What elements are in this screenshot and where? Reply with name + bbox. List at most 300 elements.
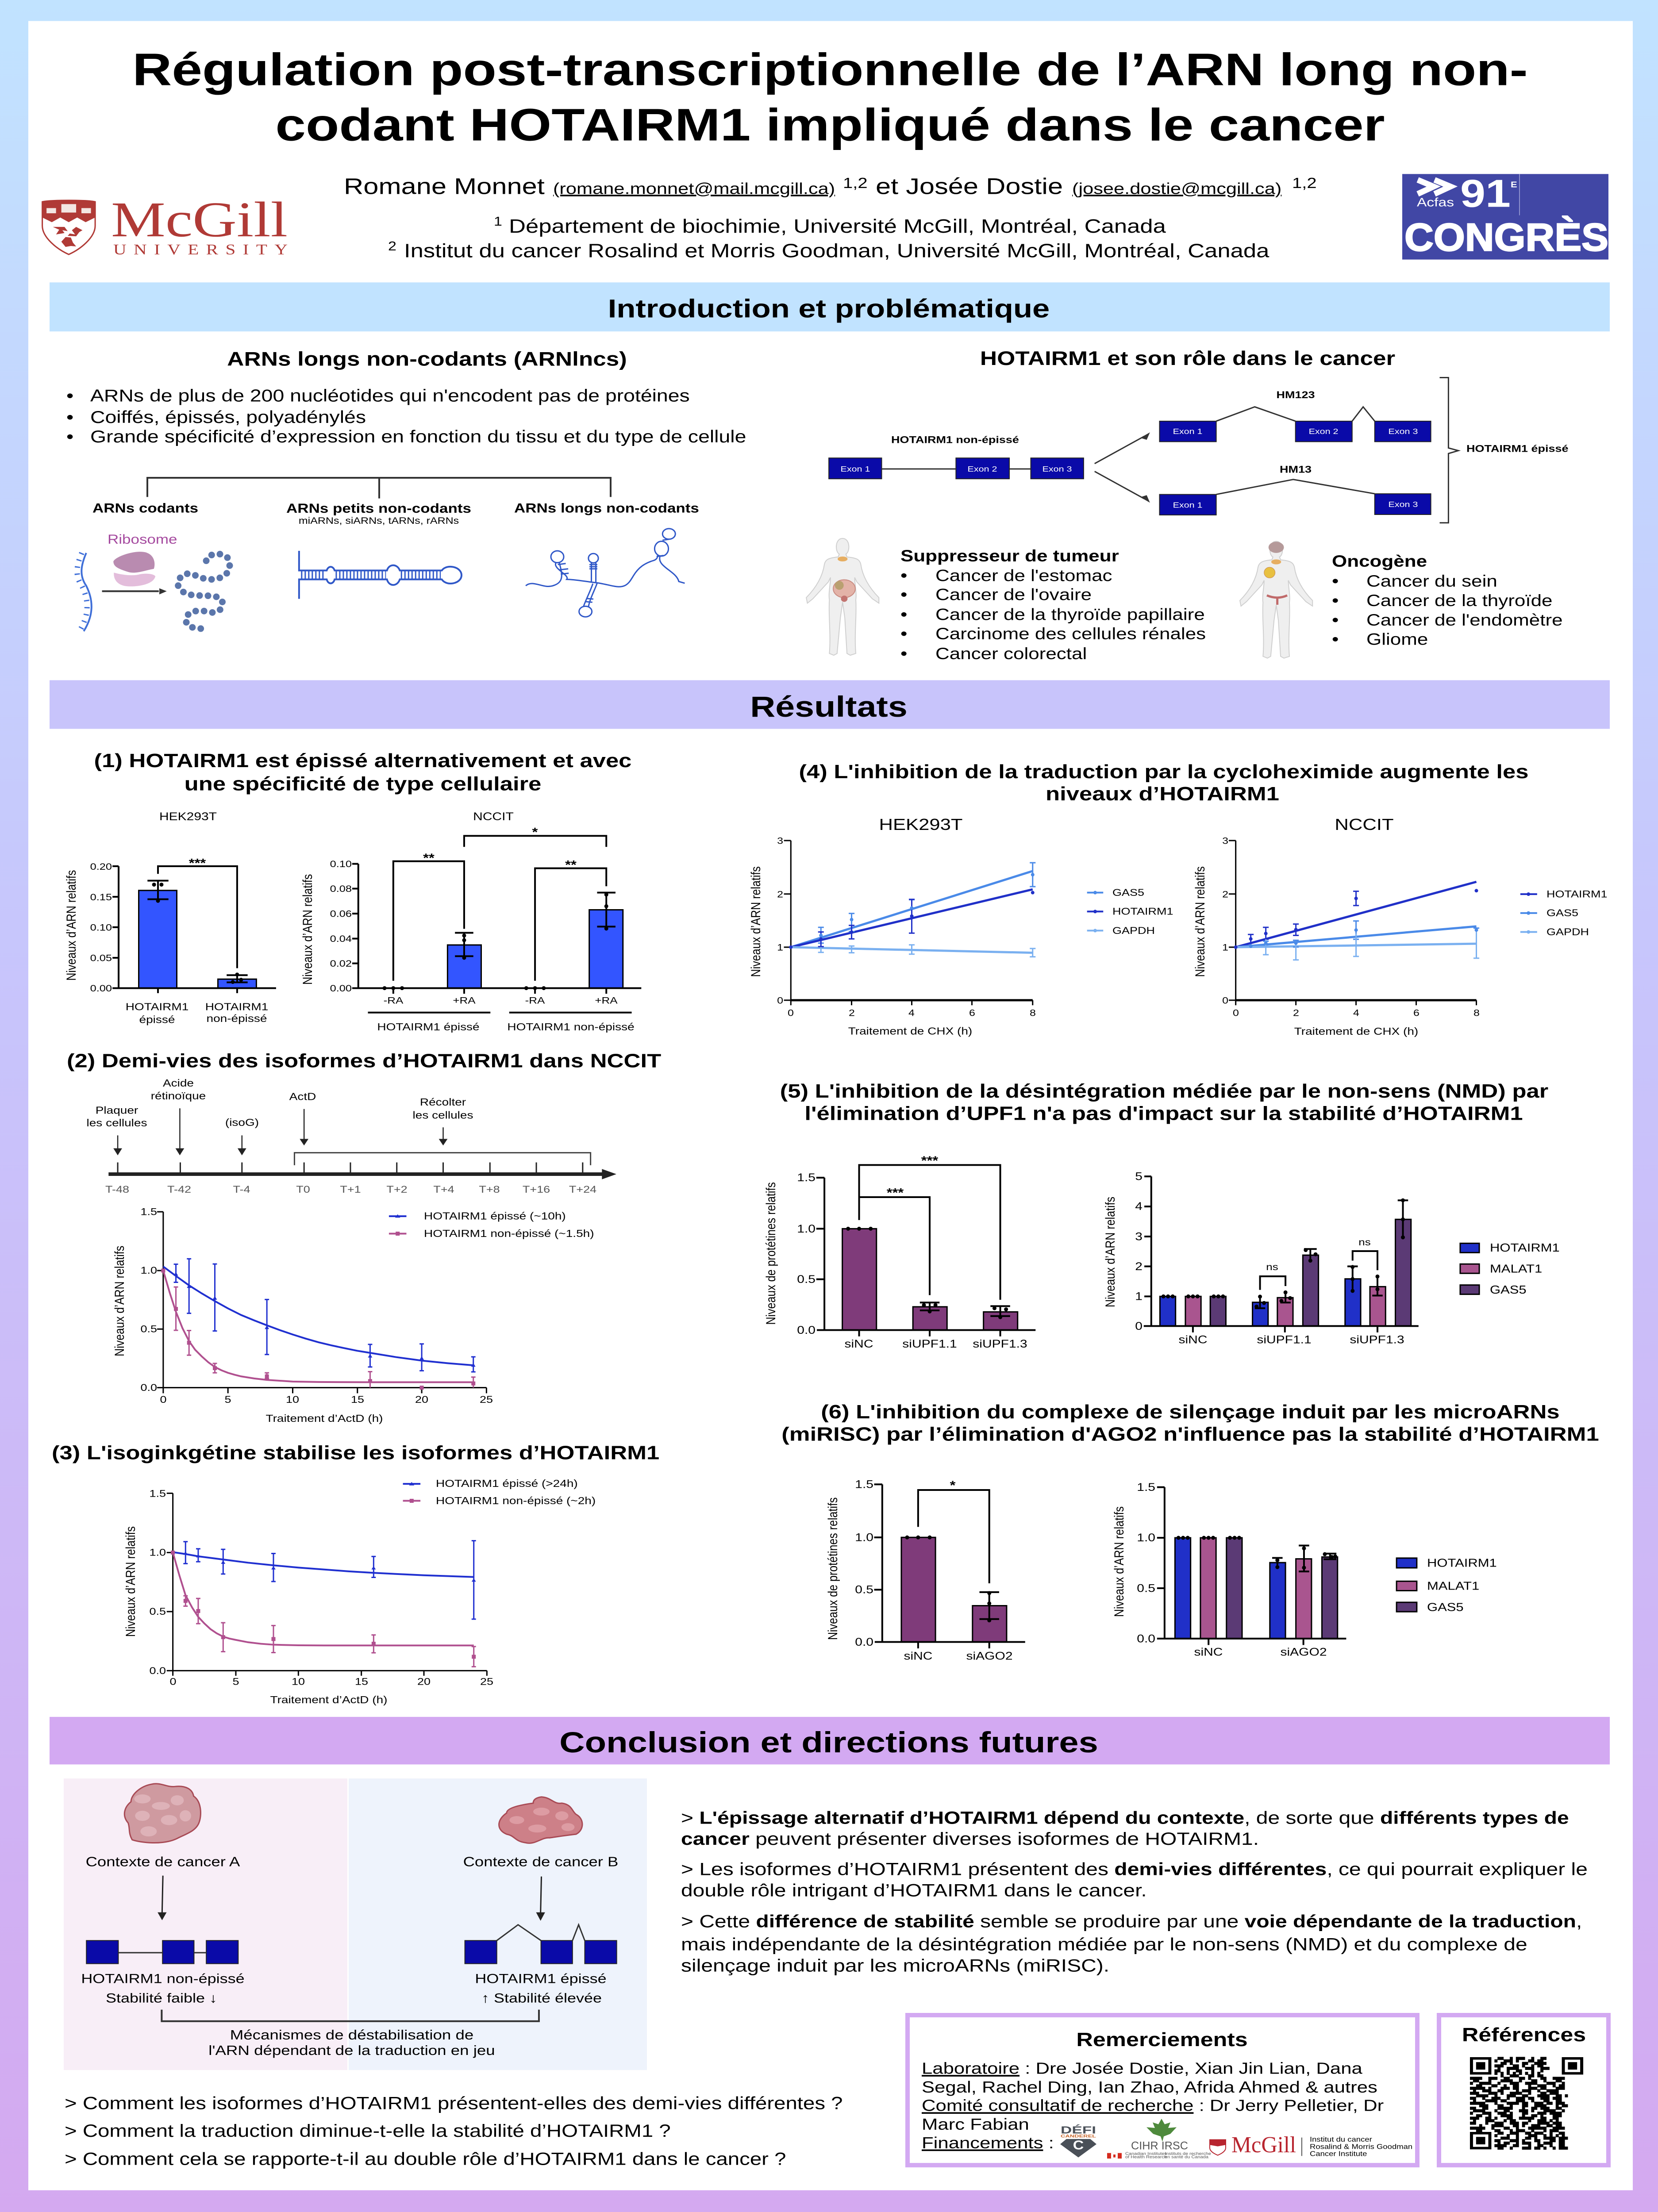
bullet list: Coiffés, épissés, polyadénylés (90, 407, 366, 427)
bar chart: UPF1 protein levels: 0.5 (797, 1273, 816, 1285)
bar chart: AGO2 RNA levels: Niveaux d’ARN relatifs (1112, 1506, 1127, 1617)
bar chart: NCCIT: HOTAIRM1 non-épissé (507, 1022, 635, 1033)
line chart: CHX HEK293T: 0 (788, 1008, 794, 1018)
bar chart: UPF1 protein levels: *** (921, 1154, 938, 1167)
heading (780, 1080, 1548, 1125)
title: codant HOTAIRM1 impliqué dans le cancer (275, 100, 1385, 150)
context backgrounds (64, 1778, 647, 2070)
title (132, 44, 1528, 150)
line chart: isoginkgetin: 0.5 (149, 1606, 166, 1617)
bar chart: NCCIT: ** (423, 852, 435, 865)
list: suppresseur de tumeur: • (900, 566, 907, 584)
conclusion text: > L'épissage alternatif d’HOTAIRM1 dépend du contexte, de sorte que différents types de (681, 1808, 1569, 1828)
diagram: isoforms: Exon 3 (1043, 465, 1072, 473)
heading (799, 761, 1528, 805)
line chart: CHX NCCIT: GAS5 (1546, 908, 1578, 918)
bar chart: HEK293T: HEK293T (159, 810, 217, 823)
bar chart: AGO2 RNA levels: siAGO2 (1280, 1646, 1327, 1658)
bar chart: HEK293T: non-épissé (207, 1013, 267, 1024)
diagram: isoforms: Exon 1 (1173, 501, 1202, 510)
line chart: CHX HEK293T: 4 (908, 1008, 915, 1018)
line chart: CHX HEK293T: HOTAIRM1 (1112, 906, 1173, 917)
conclusion text: silençage induit par les microARNs (miRISC). (681, 1956, 1109, 1976)
panel: remerciements (908, 2015, 1417, 2165)
heading: (4) L'inhibition de la traduction par la cycloheximide augmente les (799, 761, 1528, 783)
timeline: T+2 (386, 1184, 408, 1195)
list: suppresseur de tumeur: Cancer de l'estomac (935, 566, 1112, 584)
bar chart: AGO2 RNA levels: HOTAIRM1 (1427, 1557, 1497, 1570)
authors: (romane.monnet@mail.mcgill.ca) (553, 180, 835, 197)
line chart: isoginkgetin: Traitement d’ActD (h) (270, 1694, 387, 1705)
bar chart: NCCIT: HOTAIRM1 épissé (377, 1022, 480, 1033)
timeline: T+8 (479, 1184, 500, 1195)
bar chart: UPF1 RNA levels: 5 (1135, 1170, 1143, 1183)
list: oncogène: Gliome (1366, 630, 1428, 649)
authors: (josee.dostie@mcgill.ca) (1072, 180, 1281, 197)
bullet list: • (66, 386, 73, 406)
authors: 1,2 (1292, 175, 1317, 191)
heading: Remerciements (1076, 2029, 1248, 2051)
bar chart: NCCIT: 0.02 (330, 958, 352, 969)
logo: McGill Goodman Cancer Institute: Cancer Institute (1310, 2150, 1367, 2158)
timeline: T+16 (523, 1184, 550, 1195)
heading: (miRISC) par l’élimination d'AGO2 n'influence pas la stabilité d’HOTAIRM1 (781, 1424, 1599, 1445)
acknowledgement text: Marc Fabian (922, 2116, 1029, 2133)
bar chart: UPF1 RNA levels: siUPF1.1 (1257, 1333, 1312, 1346)
section banner: Résultats (50, 680, 1610, 729)
section banner: Introduction et problématique: Introduction et problématique (608, 294, 1050, 323)
line chart: CHX NCCIT: 6 (1413, 1008, 1419, 1018)
line chart: half-lives: 1.0 (140, 1265, 157, 1276)
section banner: Introduction et problématique (50, 282, 1610, 331)
bar chart: UPF1 protein levels: siUPF1.1 (902, 1337, 957, 1350)
future directions questions (65, 2094, 843, 2169)
conclusion text: cancer peuvent présenter diverses isoformes de HOTAIRM1. (681, 1829, 1259, 1849)
list: oncogène: Oncogène (1332, 552, 1427, 570)
mechanism caption: l'ARN dépendant de la traduction en jeu (208, 2043, 495, 2058)
list: suppresseur de tumeur: Cancer de l'ovaire (935, 585, 1092, 604)
heading: niveaux d’HOTAIRM1 (1046, 783, 1279, 805)
bar chart: AGO2 RNA levels: 1.0 (1137, 1532, 1155, 1544)
mechanism caption (208, 2028, 495, 2058)
bar chart: HEK293T: HOTAIRM1 (205, 1001, 268, 1013)
diagram: isoforms (829, 378, 1568, 523)
timeline: T-4 (233, 1184, 250, 1195)
section banner: Résultats: Résultats (750, 691, 908, 723)
line chart: CHX NCCIT: 4 (1353, 1008, 1359, 1018)
bar chart: UPF1 RNA levels: siUPF1.3 (1350, 1333, 1404, 1346)
line chart: isoginkgetin: 20 (417, 1676, 431, 1687)
small RNA subtitle: miARNs, siARNs, tARNs, rARNs (299, 515, 459, 526)
line chart: isoginkgetin: 10 (292, 1676, 305, 1687)
logo: Défi Canderel: C (1073, 2138, 1084, 2152)
logo: Défi Canderel: DÉFI (1061, 2124, 1096, 2136)
logo: McGill Goodman Cancer Institute (1210, 2132, 1412, 2158)
line chart: half-lives: 20 (415, 1394, 428, 1405)
future directions questions: > Comment la traduction diminue-t-elle la stabilité d’HOTAIRM1 ? (65, 2122, 671, 2141)
heading: (3) L'isoginkgétine stabilise les isoformes d’HOTAIRM1 (52, 1442, 659, 1463)
bar chart: HEK293T: 0.05 (90, 952, 112, 963)
line chart: isoginkgetin: 0.0 (149, 1666, 166, 1677)
line chart: CHX HEK293T: 0 (777, 995, 783, 1006)
section banner: Conclusion et directions futures: Conclusion et directions futures (559, 1726, 1098, 1759)
bar chart: HEK293T: 0.00 (90, 983, 112, 993)
line chart: CHX HEK293T: GAS5 (1112, 887, 1144, 898)
line chart: half-lives: 10 (286, 1394, 299, 1405)
line chart: isoginkgetin: 1.5 (149, 1488, 166, 1499)
panel: figure 5 (763, 1080, 1560, 1350)
line chart: half-lives: Traitement d’ActD (h) (266, 1413, 383, 1425)
heading: l'élimination d’UPF1 n'a pas d'impact sur la stabilité d’HOTAIRM1 (804, 1103, 1523, 1125)
context labels (86, 1855, 618, 1870)
list: suppresseur de tumeur: Cancer de la thyroïde papillaire (935, 605, 1205, 624)
bar chart: AGO2 RNA levels: 1.5 (1137, 1481, 1155, 1493)
bar chart: UPF1 RNA levels: HOTAIRM1 (1490, 1242, 1560, 1255)
line chart: isoginkgetin: HOTAIRM1 non-épissé (~2h) (436, 1495, 596, 1506)
bar chart: UPF1 protein levels: 0.0 (797, 1324, 816, 1336)
logo: McGill Goodman Cancer Institute: Institut du cancer (1310, 2135, 1372, 2143)
diagram: isoforms: Exon 3 (1389, 427, 1418, 436)
acknowledgement text: Laboratoire : Dre Josée Dostie, Xian Jin Lian, Dana (922, 2059, 1363, 2078)
line chart: isoginkgetin: 25 (480, 1676, 493, 1687)
timeline: Plaquer (96, 1105, 138, 1116)
bar chart: HEK293T: *** (189, 856, 206, 870)
bar chart: AGO2 RNA levels: GAS5 (1427, 1601, 1464, 1614)
diagram: isoforms: Exon 3 (1389, 500, 1418, 509)
bar chart: NCCIT: ** (565, 859, 577, 872)
bar chart: NCCIT: 0.10 (330, 859, 352, 869)
line chart: CHX HEK293T: 1 (777, 942, 783, 952)
logo: Défi Canderel: CANDEREL (1061, 2134, 1096, 2139)
tree labels: ARNs petits non-codants (286, 501, 471, 516)
acknowledgement text: Financements : (922, 2134, 1054, 2152)
icon: long non-coding RNA structure (526, 529, 685, 617)
line chart: half-lives: HOTAIRM1 non-épissé (~1.5h) (424, 1228, 594, 1239)
line chart: CHX NCCIT: NCCIT (1335, 815, 1394, 833)
authors: et Josée Dostie (876, 173, 1063, 199)
context labels: Contexte de cancer B (463, 1855, 618, 1870)
icon: body with oncogene organs (1240, 541, 1312, 658)
list: suppresseur de tumeur: • (900, 625, 907, 643)
bar chart: NCCIT (300, 810, 641, 1033)
acknowledgement text: Segal, Rachel Ding, Ian Zhao, Afrida Ahmed & autres (922, 2078, 1377, 2096)
bar chart: UPF1 RNA levels: ns (1358, 1237, 1371, 1248)
tree bracket (147, 478, 611, 499)
line chart: half-lives: Niveaux d’ARN relatifs (112, 1246, 127, 1356)
bar chart: UPF1 protein levels: *** (887, 1186, 904, 1199)
bar chart: UPF1 protein levels: 1.5 (797, 1171, 816, 1183)
bar chart: UPF1 RNA levels (1103, 1170, 1560, 1346)
line chart: CHX NCCIT: 0 (1233, 1008, 1239, 1018)
icon: QR code (1470, 2057, 1583, 2149)
bar chart: UPF1 RNA levels: ns (1266, 1262, 1278, 1272)
diagram: isoforms: Exon 2 (968, 465, 997, 473)
isoform labels: HOTAIRM1 non-épissé (81, 1971, 245, 1986)
list: oncogène: • (1332, 572, 1339, 590)
bar chart: AGO2 protein levels: 1.0 (855, 1531, 873, 1544)
arrows and exon diagrams (86, 1876, 617, 2021)
line chart: CHX NCCIT: 2 (1293, 1008, 1299, 1018)
logo: Acfas 91e congrès: Acfas (1417, 196, 1454, 209)
list: oncogène (1332, 552, 1563, 649)
line chart: isoginkgetin: 15 (355, 1676, 368, 1687)
line chart: CHX NCCIT: 8 (1473, 1008, 1480, 1018)
bar chart: AGO2 RNA levels: siNC (1194, 1646, 1223, 1658)
timeline: (isoG) (225, 1117, 259, 1128)
bar chart: HEK293T: 0.15 (90, 892, 112, 902)
tree labels: ARNs longs non-codants (514, 501, 699, 515)
bar chart: NCCIT: NCCIT (473, 810, 514, 823)
logo: Défi Canderel (1060, 2124, 1096, 2158)
bar chart: AGO2 protein levels (825, 1478, 1025, 1662)
line chart: half-lives: 1.5 (140, 1207, 157, 1217)
diagram: isoforms: HOTAIRM1 épissé (1466, 444, 1568, 454)
panel: références (1439, 2015, 1608, 2165)
timeline: rétinoïque (151, 1091, 206, 1102)
bar chart: UPF1 protein levels: Niveaux de protétines relatifs (763, 1182, 778, 1325)
list: suppresseur de tumeur (900, 547, 1206, 663)
section banner: Conclusion et directions futures (50, 1717, 1610, 1764)
panel: figure 3 (52, 1442, 659, 1705)
logo: McGill University (42, 192, 288, 258)
bar chart: NCCIT: Niveaux d’ARN relatifs (300, 874, 315, 985)
future directions questions: > Comment les isoformes d’HOTAIRM1 présentent-elles des demi-vies différentes ? (65, 2094, 843, 2113)
timeline: T+24 (569, 1184, 596, 1195)
line chart: CHX NCCIT: 3 (1222, 835, 1228, 846)
line chart: CHX HEK293T: Niveaux d’ARN relatifs (748, 866, 763, 977)
bar chart: UPF1 RNA levels: MALAT1 (1490, 1263, 1542, 1275)
line chart: CHX HEK293T: 6 (969, 1008, 975, 1018)
list: oncogène: Cancer de l'endomètre (1366, 611, 1563, 629)
bar chart: UPF1 protein levels: 1.0 (797, 1222, 816, 1235)
list: oncogène: • (1332, 630, 1339, 649)
line chart: isoginkgetin: HOTAIRM1 épissé (>24h) (436, 1478, 578, 1489)
logo: McGill Goodman Cancer Institute: Rosalind & Morris Goodman (1310, 2143, 1412, 2151)
heading: ARNs longs non-codants (ARNlncs) (227, 349, 627, 370)
list: oncogène: Cancer de la thyroïde (1366, 591, 1553, 610)
bar chart: HEK293T: HOTAIRM1 (126, 1001, 188, 1013)
bar chart: NCCIT: -RA (525, 995, 545, 1006)
timeline: ActD (289, 1091, 316, 1102)
bar chart: AGO2 RNA levels: MALAT1 (1427, 1580, 1479, 1593)
line chart: CHX NCCIT: Niveaux d’ARN relatifs (1193, 866, 1208, 977)
heading: une spécificité de type cellulaire (185, 773, 541, 795)
bar chart: AGO2 protein levels: 0.0 (855, 1636, 873, 1648)
timeline: les cellules (87, 1118, 147, 1129)
bar chart: UPF1 protein levels (763, 1154, 1035, 1350)
icon: tumor A (124, 1784, 200, 1843)
heading (94, 750, 631, 795)
logo: CIHR: CIHR IRSC (1131, 2139, 1188, 2152)
logo: CIHR: Instituts de recherche (1165, 2152, 1211, 2156)
line chart: CHX NCCIT: GAPDH (1546, 927, 1589, 938)
panel: figure 2 (67, 1050, 662, 1425)
timeline: T+4 (433, 1184, 454, 1195)
line chart: half-lives: 0.5 (140, 1324, 157, 1335)
panel: conclusion diagram (64, 1778, 647, 2070)
diagram: isoforms: Exon 2 (1309, 427, 1338, 436)
bar chart: AGO2 protein levels: 0.5 (855, 1583, 873, 1596)
list: suppresseur de tumeur: Cancer colorectal (935, 645, 1087, 663)
line chart: CHX HEK293T: HEK293T (879, 815, 963, 833)
affiliations: Département de biochimie, Université McGill, Montréal, Canada (509, 215, 1166, 237)
list: suppresseur de tumeur: • (900, 645, 907, 663)
panel: figure 6 (781, 1401, 1599, 1662)
bar chart: AGO2 protein levels: * (950, 1479, 956, 1492)
conclusion text (681, 1808, 1588, 1976)
heading (781, 1401, 1599, 1445)
bar chart: UPF1 protein levels: siUPF1.3 (973, 1337, 1027, 1350)
line chart: half-lives: 15 (351, 1394, 364, 1405)
bar chart: UPF1 RNA levels: 2 (1135, 1260, 1143, 1272)
logo: Acfas 91e congrès (1402, 172, 1608, 260)
timeline: T-42 (167, 1184, 191, 1195)
diagram: isoforms: Exon 1 (1173, 427, 1202, 436)
line chart: CHX HEK293T: GAPDH (1112, 926, 1155, 936)
bar chart: NCCIT: +RA (595, 995, 618, 1006)
panel: figure 1 (64, 750, 641, 1033)
line chart: CHX HEK293T: 2 (777, 889, 783, 899)
bar chart: NCCIT: 0.06 (330, 908, 352, 919)
authors: 1,2 (843, 175, 868, 191)
line chart: CHX HEK293T: 8 (1030, 1008, 1036, 1018)
acknowledgement text: Comité consultatif de recherche : Dr Jerry Pelletier, Dr (922, 2097, 1384, 2115)
heading: (1) HOTAIRM1 est épissé alternativement et avec (94, 750, 631, 772)
bar chart: HEK293T (64, 810, 276, 1025)
line chart: isoginkgetin: 5 (232, 1676, 239, 1687)
logo: CIHR: of Health Research (1125, 2155, 1167, 2159)
diagram: isoforms: HOTAIRM1 non-épissé (891, 435, 1019, 445)
heading: Références (1462, 2024, 1586, 2046)
isoform labels: ↑ Stabilité élevée (481, 1991, 602, 2006)
line chart: isoginkgetin: 0 (169, 1676, 177, 1687)
bar chart: HEK293T: 0.10 (90, 922, 112, 933)
bar chart: NCCIT: 0.00 (330, 983, 352, 993)
logo: CIHR: Canadian Institutes (1125, 2152, 1167, 2156)
context labels: Contexte de cancer A (86, 1855, 240, 1870)
conclusion text: mais indépendante de la désintégration médiée par le non-sens (NMD) et du complexe de (681, 1935, 1527, 1954)
bar chart: HEK293T: 0.20 (90, 861, 112, 872)
diagram: isoforms: HM123 (1276, 390, 1315, 400)
line chart: CHX HEK293T: 3 (777, 835, 783, 846)
bar chart: UPF1 RNA levels: 3 (1135, 1230, 1143, 1243)
line chart: CHX NCCIT (1193, 815, 1607, 1037)
line chart: isoginkgetin (123, 1478, 596, 1705)
heading: (6) L'inhibition du complexe de silençage induit par les microARNs (821, 1401, 1560, 1423)
line chart: CHX NCCIT: 1 (1222, 942, 1228, 952)
heading: (5) L'inhibition de la désintégration médiée par le non-sens (NMD) par (780, 1080, 1548, 1102)
list: oncogène: Cancer du sein (1366, 572, 1497, 590)
panel: figure 4 (748, 761, 1607, 1037)
bullet list: Grande spécificité d’expression en fonction du tissu et du type de cellule (90, 427, 746, 446)
line chart: half-lives: 5 (224, 1394, 231, 1405)
bar chart: AGO2 RNA levels (1112, 1481, 1497, 1658)
bar chart: HEK293T: Niveaux d’ARN relatifs (64, 870, 79, 981)
line chart: CHX NCCIT: Traitement de CHX (h) (1294, 1026, 1418, 1037)
icon: translation from mRNA to protein (77, 552, 230, 631)
bullet list: ARNs de plus de 200 nucléotides qui n'encodent pas de protéines (90, 386, 690, 406)
bar chart: AGO2 protein levels: 1.5 (855, 1478, 873, 1490)
icon: tumor B (499, 1797, 582, 1843)
timeline (87, 1078, 616, 1195)
list: oncogène: • (1332, 591, 1339, 610)
tree labels: ARNs codants (92, 501, 198, 515)
list: suppresseur de tumeur: • (900, 585, 907, 604)
line chart: CHX HEK293T (748, 815, 1173, 1037)
tree labels (92, 501, 699, 516)
icon: body with tumor suppressor organs (806, 538, 879, 655)
bar chart: UPF1 RNA levels: 0 (1135, 1320, 1143, 1332)
bar chart: AGO2 RNA levels: 0.5 (1137, 1582, 1155, 1594)
bar chart: UPF1 protein levels: siNC (845, 1337, 873, 1350)
line chart: half-lives: 25 (480, 1394, 493, 1405)
logo: CIHR: en santé du Canada (1165, 2155, 1208, 2159)
line chart: half-lives (112, 1207, 594, 1425)
line chart: isoginkgetin: 1.0 (149, 1548, 166, 1558)
bar chart: UPF1 RNA levels: GAS5 (1490, 1284, 1527, 1297)
line chart: half-lives: HOTAIRM1 épissé (~10h) (424, 1211, 566, 1222)
logo: McGill University: McGill (111, 192, 288, 248)
acknowledgement text (922, 2059, 1384, 2152)
icon: small non-coding RNA hairpin (299, 551, 462, 599)
line chart: half-lives: 0.0 (140, 1382, 157, 1394)
conclusion text: > Les isoformes d’HOTAIRM1 présentent des demi-vies différentes, ce qui pourrait expliquer le (681, 1859, 1588, 1879)
affiliations (388, 215, 1269, 262)
bar chart: NCCIT: 0.04 (330, 933, 352, 944)
logo: Acfas 91e congrès: E (1511, 180, 1517, 189)
bullet list: • (66, 407, 73, 427)
bar chart: UPF1 RNA levels: 4 (1135, 1200, 1143, 1212)
bar chart: HEK293T: épissé (139, 1014, 175, 1025)
bar chart: UPF1 RNA levels: Niveaux d’ARN relatifs (1103, 1197, 1118, 1307)
line chart: isoginkgetin: Niveaux d’ARN relatifs (123, 1526, 138, 1637)
ribosome label: Ribosome (108, 532, 177, 547)
mechanism caption: Mécanismes de déstabilisation de (230, 2028, 473, 2043)
diagram: isoforms: HM13 (1280, 464, 1312, 475)
bar chart: NCCIT: 0.08 (330, 883, 352, 894)
affiliations: Institut du cancer Rosalind et Morris Goodman, Université McGill, Montréal, Canada (404, 240, 1269, 262)
bar chart: AGO2 RNA levels: 0.0 (1137, 1632, 1155, 1645)
affiliations: 2 (388, 239, 396, 253)
logo: McGill Goodman Cancer Institute: McGill (1231, 2132, 1296, 2158)
panel: ARN longs non-codants (66, 349, 746, 631)
bar chart: UPF1 RNA levels: siNC (1179, 1333, 1207, 1346)
heading: HOTAIRM1 et son rôle dans le cancer (980, 348, 1395, 369)
line chart: CHX NCCIT: 2 (1222, 889, 1228, 899)
bar chart: NCCIT: * (532, 826, 538, 839)
bar chart: UPF1 RNA levels: 1 (1135, 1290, 1143, 1302)
bullet list (66, 386, 746, 446)
future directions questions: > Comment cela se rapporte-t-il au double rôle d’HOTAIRM1 dans le cancer ? (65, 2150, 786, 2169)
affiliations: 1 (494, 215, 502, 228)
timeline: les cellules (413, 1110, 473, 1121)
logo: CIHR (1107, 2119, 1211, 2159)
bar chart: NCCIT: +RA (453, 995, 476, 1006)
line chart: CHX HEK293T: Traitement de CHX (h) (848, 1025, 972, 1037)
timeline: Acide (163, 1078, 194, 1089)
conclusion text: > Cette différence de stabilité semble se produire par une voie dépendante de la traduction, (681, 1912, 1582, 1932)
isoform labels (81, 1971, 607, 2006)
list: suppresseur de tumeur: • (900, 605, 907, 624)
conclusion text: double rôle intrigant d’HOTAIRM1 dans le cancer. (681, 1881, 1147, 1901)
bar chart: AGO2 protein levels: siAGO2 (966, 1650, 1013, 1662)
timeline: T+1 (340, 1184, 361, 1195)
line chart: CHX NCCIT: 0 (1222, 995, 1228, 1006)
authors (344, 173, 1317, 199)
line chart: CHX NCCIT: HOTAIRM1 (1546, 889, 1607, 900)
diagram: isoforms: Exon 1 (841, 465, 870, 473)
bar chart: AGO2 protein levels: Niveaux de protétines relatifs (825, 1498, 840, 1640)
